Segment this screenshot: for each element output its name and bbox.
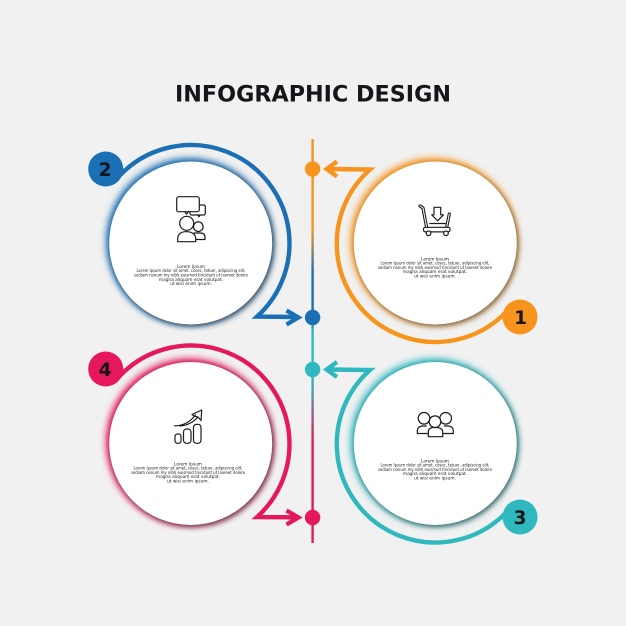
step 4 text: sediam nonum my nibh euismod tincidunt ut laoreet dolore	[131, 470, 245, 476]
step 1 circle	[350, 158, 518, 326]
step 3 text: sediam nonum my nibh euismod tincidunt ut laoreet dolore	[378, 467, 492, 473]
panel: step 1	[326, 158, 538, 342]
panel: step 3	[326, 358, 538, 543]
step 2 text: sediam nonum my nibh euismod tincidunt ut laoreet dolore	[134, 272, 248, 278]
icon: growth bars	[174, 410, 202, 443]
panel: step 2	[88, 145, 298, 326]
step 2 badge	[88, 152, 123, 186]
step 1 badge: 1	[514, 308, 527, 329]
step 3 text	[378, 458, 492, 481]
step 4 text: magna aliquam erat volutpat.	[156, 474, 220, 480]
step 4 connector arrow	[119, 346, 298, 524]
step 4 circle	[106, 358, 274, 527]
step 3 text: Lorem Ipsum dolor sit amet, cosec, tetuer, adipiscing elit,	[380, 462, 490, 468]
step 2 text	[134, 264, 248, 287]
step 1 text: Lorem Ipsum	[421, 256, 449, 262]
step 2 text: Lorem Ipsum	[177, 264, 205, 270]
step 4 badge	[88, 352, 123, 386]
step 4 badge: 4	[99, 360, 112, 381]
step 1 text: sediam nonum my nibh euismod tincidunt ut laoreet dolore	[378, 265, 492, 271]
step 1 text: magna aliquam erat volutpat.	[403, 269, 467, 275]
step 3 badge	[502, 500, 538, 534]
icon: cart with arrow	[420, 206, 450, 236]
step 1 text: ut wisi enim ipsum.	[414, 273, 456, 279]
title: INFOGRAPHIC DESIGN	[175, 82, 451, 108]
step 2 text: magna aliquam erat volutpat.	[159, 277, 223, 283]
step 2 text: ut wisi enim ipsum.	[170, 281, 212, 287]
step 3 badge: 3	[514, 508, 526, 529]
step 3 text: Lorem Ipsum	[421, 458, 449, 464]
step 2 circle	[106, 158, 274, 326]
step 1 text	[378, 256, 492, 279]
icon: group of people	[417, 412, 453, 437]
step 1 connector arrow	[326, 162, 506, 342]
step 4 text: ut wisi enim ipsum.	[167, 478, 209, 484]
step 2 connector arrow	[119, 145, 298, 324]
step 4 text	[131, 461, 245, 484]
panel: step 4	[88, 346, 298, 527]
step 4 text: Lorem Ipsum	[174, 461, 202, 467]
step 1 badge	[502, 300, 538, 334]
icon: chat people	[177, 197, 205, 242]
step 2 badge: 2	[99, 160, 111, 181]
step 3 text: magna aliquam erat volutpat.	[403, 471, 467, 477]
step 1 text: Lorem Ipsum dolor sit amet, cosec, tetuer, adipiscing elit,	[380, 260, 490, 266]
step 4 text: Lorem Ipsum dolor sit amet, cosec, tetuer, adipiscing elit,	[134, 466, 242, 472]
step 2 text: Lorem Ipsum dolor sit amet, cosec, tetuer, adipiscing elit,	[136, 268, 246, 274]
step 3 text: ut wisi enim ipsum.	[414, 475, 456, 481]
central timeline	[305, 139, 320, 543]
step 3 circle	[350, 358, 518, 527]
step 3 connector arrow	[326, 362, 506, 543]
